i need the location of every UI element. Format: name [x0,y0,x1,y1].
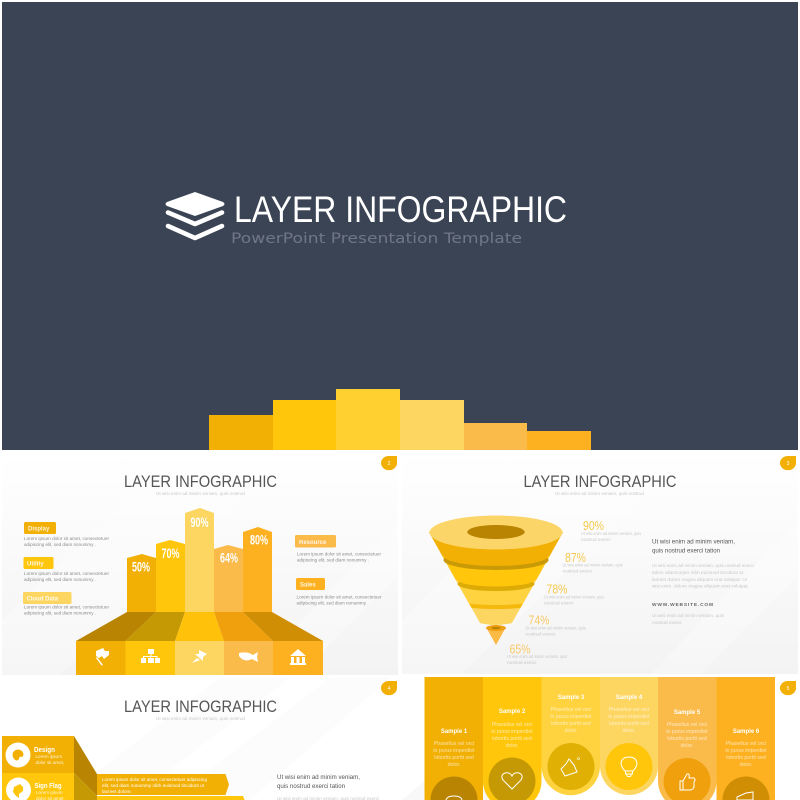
icon: flag [96,648,109,666]
text block heading: quis nostrud exerci tation [277,783,345,790]
text: Resource: Lorem ipsum dolor sit amet, consectetuer [297,552,381,558]
icon: plane [239,652,258,662]
icon: pin [192,650,207,663]
badge [780,681,796,695]
text block heading: Ut wisi enim ad minim veniam, [652,538,735,546]
website note: nostrud exerci [652,620,681,625]
cover subtitle: PowerPoint Presentation Template [231,231,522,247]
column: Sample 1: dolor. [448,762,460,768]
stat 65%: Ut wisi enim ad minim veniam, quis [507,654,568,659]
text: Utility: adipiscing elit, sed diam nonummy . [24,577,96,583]
column: Sample 4: lobortis portti sed [609,721,649,727]
text: Resource: adipiscing elit, sed diam nonummy . [297,558,369,564]
text block heading: Ut wisi enim ad minim veniam, [277,774,360,781]
step: Sign Flag: Lorem ipsum [36,790,63,795]
column: Sample 6 [716,677,775,800]
column: Sample 6: in purus imperdiet [725,748,767,754]
column: Sample 3: dolor. [565,728,577,734]
text: Resource [297,552,381,564]
column: Sample 6: lobortis portti sed [726,755,766,761]
stat 78%: nostrud exerci [544,600,573,606]
bar chart [127,508,272,612]
text: Cloud Data: adipiscing elit, sed diam nonummy . [24,610,96,616]
text block heading: quis nostrud exerci tation [652,548,720,554]
panel: cover [2,2,798,450]
badge [381,456,397,470]
column: Sample 5 [658,677,716,800]
subheading: Ut wisi enim ad minim veniam, quis nostrud [156,491,245,496]
text block body: wisi enim. dolore magna aliquam erat volutpat. [652,584,749,588]
column: Sample 5: in purus imperdiet [666,729,708,735]
label: Cloud Data: Cloud Data [26,596,59,602]
label: Utility: Utility [27,562,44,568]
badge: 2 [388,461,391,467]
column: Sample 3 [542,677,600,795]
column: Sample 4: in purus imperdiet [608,714,650,720]
funnel tip [486,628,506,645]
text block body: laoreet dolore magna aliquam erat volutpat. Ut [652,577,748,582]
column: Sample 5: lobortis portti sed [667,736,707,742]
cover title: LAYER INFOGRAPHIC [234,189,567,230]
stat 87%: nostrud exerci [562,568,592,574]
subheading: Ut wisi enim ad minim veniam, quis nostrud [156,716,245,721]
funnel opening [467,525,525,539]
column: Sample 2: Sample 2 [499,709,526,715]
text block body: tation ullamcorper nibh euismod tincidunt ut [652,570,744,575]
stat 87% [562,551,623,574]
text: Display [24,536,109,548]
label: Cloud Data [23,592,72,604]
column: Sample 3: in purus imperdiet [550,714,592,720]
badge: 3 [787,461,790,467]
heading: LAYER INFOGRAPHIC [524,472,676,491]
stat 74%: nostrud exerci [526,632,555,636]
platform [76,612,323,675]
step: Sign Flag: Sign Flag [34,783,62,790]
label: Utility [24,557,54,569]
panel: bar slide [2,453,398,675]
step: Sign Flag [2,773,74,800]
stepped bars [209,389,591,450]
column: Sample 1 [424,677,483,800]
step: Design: Design [34,747,55,754]
text block heading [652,538,735,554]
stat 90%: nostrud exerci [581,537,610,542]
arrow bar 1: elit, sed diam nonummy nibh euismod tincidunt ut [102,783,205,788]
stat 78%: Ut wisi enim ad minim veniam, quis [544,594,605,600]
text: Display: Lorem ipsum dolor sit amet, consectetuer [24,536,109,542]
stat 90%: Ut wisi enim ad minim veniam, quis [581,531,642,536]
column: Sample 1: lobortis portti sed [434,755,474,761]
column: Sample 3: Phasellus vel orci [551,707,591,713]
text: Cloud Data [24,604,109,616]
text block heading [277,774,360,790]
step: Design: dolor sit amet, [36,760,64,765]
heading: LAYER INFOGRAPHIC [124,472,277,491]
panel: stair slide [2,678,398,800]
column: Sample 1: in purus imperdiet [433,748,475,754]
stat 65%: nostrud exerci [507,660,536,665]
column: Sample 1: Phasellus vel orci [434,741,474,747]
text: Sales: Lorem ipsum dolor sit amet, consectetuer [296,594,382,600]
funnel top [430,516,562,550]
column: Sample 4 [600,677,658,795]
heading: LAYER INFOGRAPHIC [124,697,277,716]
step: Design [2,736,74,773]
badge [381,681,397,695]
icon: basket top [446,796,462,800]
column: Sample 3: Sample 3 [558,695,585,701]
stat 74%: Ut wisi enim ad minim veniam, quis [526,626,586,630]
column: Sample 6: Phasellus vel orci [726,741,766,747]
column: Sample 5: dolor. [681,743,693,749]
arrow bar 1 [97,774,229,795]
stat 65% [507,642,568,665]
label: Sales [296,578,325,590]
website: WWW.WEBSITE.COM [652,602,713,608]
website note [652,613,725,625]
bar chart: 64% [220,550,238,566]
stat 74%: 74% [528,614,550,628]
column: Sample 5: Phasellus vel orci [667,722,707,728]
icon: hierarchy [141,649,160,663]
step folds [74,736,97,800]
text block body [652,563,754,588]
panel: funnel slide [402,453,798,675]
bar chart: 80% [250,532,268,548]
column: Sample 2: dolor. [506,743,518,749]
icon: layers [166,192,224,238]
arrow bar 1: laoreet dolore. [102,789,132,794]
column: Sample 4: dolor. [623,728,635,734]
stat 90% [581,519,642,542]
label: Resource: Resource [299,540,327,546]
text: Utility: Lorem ipsum dolor sit amet, consectetuer [24,571,109,577]
badge [780,456,796,470]
stat 78% [544,582,605,606]
stat 65%: 65% [510,642,530,656]
panel: columns slide [402,677,798,800]
column: Sample 2: in purus imperdiet [491,729,533,735]
text: Utility [24,571,109,583]
column: Sample 4: Sample 4 [616,695,643,701]
label: Display: Display [28,526,50,532]
column: Sample 2: Phasellus vel orci [492,722,532,728]
bar chart: 90% [190,514,209,530]
text block body: Ut wisi enim ad minim veniam, quis nostrud exerci [652,563,754,568]
stat 87%: Ut wisi enim ad minim veniam, quis [562,562,623,568]
bar chart: 70% [162,545,180,561]
text: Sales [296,594,382,606]
text: Display: adipiscing elit, sed diam nonummy . [24,542,96,548]
stat 74% [526,614,586,636]
column: Sample 1: Sample 1 [441,729,468,735]
column: Sample 3: lobortis portti sed [551,721,591,727]
column: Sample 4: Phasellus vel orci [609,707,649,713]
badge: 4 [388,686,391,692]
website note: Ut wisi enim ad minim veniam, quis [652,613,725,618]
column: Sample 5: Sample 5 [674,710,701,716]
column: Sample 6: dolor. [740,762,752,768]
badge: 5 [787,686,790,692]
label: Display [24,522,56,534]
label: Sales: Sales [300,582,316,588]
text: Sales: adipiscing elit, sed diam nonummy . [296,600,368,606]
subheading: Ut wisi enim ad minim veniam, quis nostrud [555,491,644,496]
step: Design: Lorem ipsum [36,754,62,759]
arrow bar 1: Lorem ipsum dolor sit amet, consectetuer adipiscing [102,777,207,782]
stat 87%: 87% [565,551,586,565]
funnel chart [425,516,567,645]
bar chart: 50% [132,558,150,574]
column: Sample 6: Sample 6 [733,729,760,735]
stat 78%: 78% [546,582,568,596]
text: Cloud Data: Lorem ipsum dolor sit amet, consectetuer [24,604,109,610]
column: Sample 2 [483,677,542,800]
icon: bank [290,649,306,665]
stat 90%: 90% [583,519,604,533]
label: Resource [295,535,336,548]
arrow bar 2 [97,796,247,800]
column: Sample 2: lobortis portti sed [492,736,532,742]
